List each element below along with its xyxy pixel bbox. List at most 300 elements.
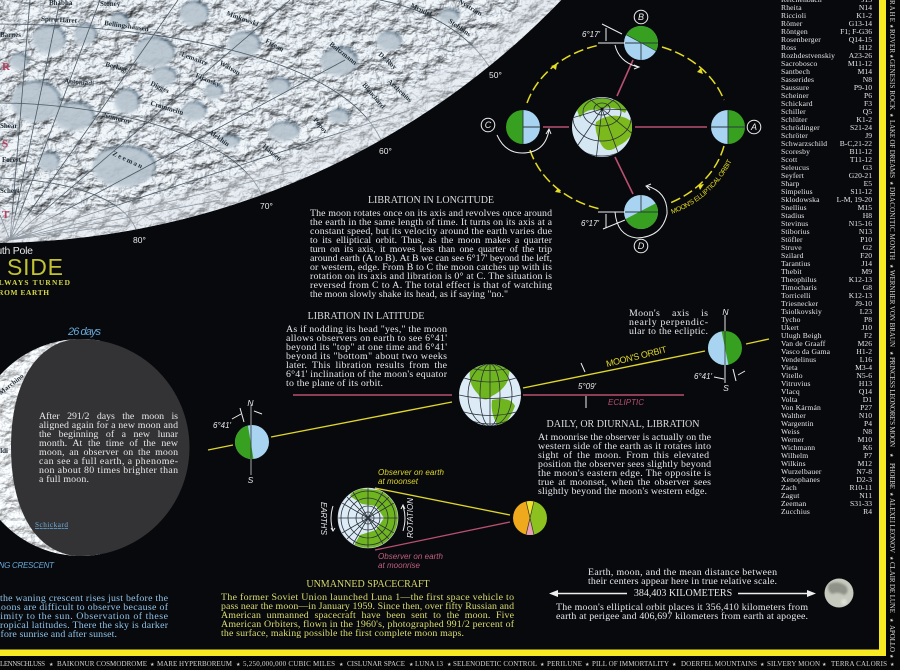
bottom border text: DOERFEL MOUNTAINS	[681, 660, 757, 668]
moon's axis note: nearly perpendic-	[629, 317, 708, 328]
right border text: ★	[888, 453, 894, 458]
crater grid references: G13-14	[849, 19, 872, 28]
crater names: Stöfler	[781, 235, 803, 244]
pink radius lines	[543, 60, 707, 194]
new moon text: aligned again for a new moon and	[39, 420, 178, 431]
crater grid references: K1-2	[856, 115, 872, 124]
crater grid references: R10-11	[850, 483, 872, 492]
crater names: Wilhelm	[781, 451, 808, 460]
crater names: Vitello	[781, 371, 803, 380]
crater names: Volta	[781, 395, 798, 404]
crater grid references: M3-4	[855, 363, 872, 372]
crater names: Tarantius	[781, 259, 810, 268]
crater names: Simpelius	[781, 187, 813, 196]
crater names: Vieta	[781, 363, 798, 372]
right border text: ★	[888, 556, 894, 561]
crater names: Zeeman	[781, 499, 806, 508]
moon diurnal	[513, 500, 547, 536]
crater grid references: K12-13	[849, 275, 872, 284]
bottom border text: ★	[150, 662, 155, 668]
crater grid references: M11-12	[848, 59, 872, 68]
new moon text	[39, 411, 179, 485]
crater grid references: H13	[859, 379, 872, 388]
crater grid references: E5	[864, 179, 872, 188]
panel: daily libration text	[538, 419, 712, 497]
graticule	[0, 0, 490, 240]
latitude labels: 60°	[379, 146, 392, 156]
moon labels: Blanchard	[360, 81, 387, 111]
moon labels	[0, 0, 484, 195]
crater names: Scheiner	[781, 91, 809, 100]
diagram labels: 5°09'	[578, 382, 597, 391]
crater names: Stadius	[781, 211, 804, 220]
pink grid letters	[2, 61, 11, 221]
crater grid references: K1-2	[856, 11, 872, 20]
crater names: Wargentin	[781, 419, 814, 428]
bottom border text: PILL OF IMMORTALITY	[592, 660, 669, 668]
right border text: ★	[888, 113, 894, 118]
panel: libration in latitude text: As if nodding its head "yes," the moon	[286, 324, 447, 335]
panel: unmanned spacecraft: The former Soviet Union launched Luna 1—the first space vehicle to	[221, 592, 514, 603]
panel: libration in longitude text: turn on its axis, it moves less than one quarter of the trip	[310, 244, 552, 255]
crater names: Vasco da Gama	[781, 347, 831, 356]
crescent moon: Schickard	[35, 521, 68, 529]
panel: unmanned spacecraft: UNMANNED SPACECRAFT	[306, 579, 430, 590]
crater grid references: M12	[858, 459, 872, 468]
crater names: Szilard	[781, 251, 804, 260]
moon B	[624, 26, 658, 60]
panel: earth-moon distance scale: Earth, moon, and the mean distance between	[588, 567, 777, 578]
crater names: Scott	[781, 155, 798, 164]
right border text: ★	[888, 351, 894, 356]
crater grid references: J14	[861, 259, 872, 268]
crater names: Wilkins	[781, 459, 806, 468]
panel: libration in latitude text: 6°41' inclination of the moon's equator	[286, 369, 448, 380]
crater grid references: N8	[863, 75, 872, 84]
crater grid references: F2	[864, 331, 872, 340]
moon labels: Crommelin	[149, 99, 184, 117]
position letters: B	[638, 12, 644, 22]
crater grid references: M9	[861, 267, 872, 276]
position letters	[481, 10, 761, 253]
moon labels: Minkowski	[225, 9, 260, 28]
crater grid references: M26	[858, 339, 872, 348]
panel: libration in longitude text: reversed from C to A. The total effect is that of watching	[310, 280, 552, 291]
crater grid references: N10	[859, 411, 872, 420]
crater names: Struve	[781, 243, 802, 252]
panel: daily libration text: true at moonset, when the observer sees	[538, 477, 711, 488]
crater names: Seleucus	[781, 163, 809, 172]
bottom border text: ★	[822, 662, 827, 668]
moon labels: Arrhenius	[386, 78, 414, 104]
crater grid references: H1-2	[856, 347, 872, 356]
crater grid references: P8	[864, 315, 872, 324]
bottom border text: ★	[760, 662, 765, 668]
crater names: Timocharis	[781, 283, 817, 292]
crescent moon: 26 days	[67, 326, 102, 338]
panel: libration in latitude text: beyond its "top" at one time and 6°41'	[286, 342, 447, 353]
crater names: Van de Graaff	[781, 339, 826, 348]
position letters: A	[750, 122, 757, 132]
waning crescent label and text: the waning crescent rises just before the	[0, 593, 169, 604]
diagram labels: N	[722, 307, 729, 317]
panel: daily libration text: sight of the moon. From this elevated	[538, 450, 709, 461]
crater grid references: H8	[863, 211, 872, 220]
crater grid references: J10	[861, 323, 872, 332]
moon labels: Shear	[0, 122, 18, 130]
right border text: ★	[888, 24, 894, 29]
crater grid references: S31-33	[850, 499, 872, 508]
crater grid references: Q5	[863, 107, 872, 116]
right border text: ★	[888, 618, 894, 623]
panel: libration in latitude text	[286, 311, 448, 389]
crater grid references: F1; F-G36	[840, 27, 872, 36]
bottom border text: LENNSCHLUSS	[0, 660, 45, 668]
crater grid references: N15-16	[849, 219, 872, 228]
new moon text: a full moon.	[39, 474, 89, 485]
right border text: WERNHER VON BRAUN	[888, 270, 896, 347]
diagram: diurnal libration	[319, 468, 547, 570]
small full moon	[824, 578, 854, 608]
moon left	[235, 405, 269, 475]
right border text: ★	[888, 181, 894, 186]
crater grid references: Q14-15	[849, 35, 872, 44]
moon labels: Spiru Haret	[41, 15, 78, 25]
moon labels: Hausen	[261, 142, 283, 163]
crater names: Stevinus	[781, 219, 808, 228]
panel: daily libration text: DAILY, OR DIURNAL, LIBRATION	[547, 419, 699, 430]
bottom border text: MARE HYPERBOREUM	[157, 660, 233, 668]
crater grid references: N11	[859, 491, 872, 500]
bottom border text: TERRA CALORIS	[831, 660, 887, 668]
crater names: Sacrobosco	[781, 59, 818, 68]
crater names: Schlüter	[781, 115, 808, 124]
crater names: Santbech	[781, 67, 810, 76]
crater grid references: S11-12	[850, 187, 872, 196]
crater grid references: M10	[858, 435, 872, 444]
crater names: Schickard	[781, 99, 813, 108]
crater names: Wurzelbauer	[781, 467, 822, 476]
moon labels: Berlage	[104, 60, 129, 74]
moon labels: Lemaître	[180, 50, 209, 67]
moon labels: Digges	[149, 80, 171, 95]
crater names: Schiller	[781, 107, 806, 116]
diagram labels: ECLIPTIC	[608, 398, 644, 407]
crescent moon	[0, 326, 190, 560]
moon labels: Mendel	[409, 2, 433, 18]
diagram labels: N	[247, 398, 254, 408]
right border text: GENESIS ROCK	[888, 59, 896, 110]
crater grid references: P9-10	[854, 83, 872, 92]
moon's axis note: ular to the ecliptic.	[629, 326, 708, 337]
crater grid references: N8	[863, 427, 872, 436]
moon labels: Barnes	[0, 31, 21, 39]
crater grid references: A23-26	[849, 51, 872, 60]
new moon text: can see a full earth, a phenome-	[39, 456, 178, 467]
angle markers	[232, 363, 745, 422]
crater names: Saussure	[781, 83, 810, 92]
right border text: ★	[888, 264, 894, 269]
crater grid references: G8	[863, 283, 872, 292]
crater grid references: D2-3	[856, 475, 872, 484]
panel: unmanned spacecraft: the surface, making possible the first complete moon maps.	[221, 628, 464, 639]
latitude labels: 70°	[260, 201, 273, 211]
right border text: ★	[888, 492, 894, 497]
panel: daily libration text: At moonrise the observer is actually on the	[538, 432, 712, 443]
right border text: DRACONITIC MONTH	[888, 187, 896, 260]
crater grid references: P27	[860, 403, 872, 412]
crater grid references: H12	[859, 43, 872, 52]
crater names: Werner	[781, 435, 804, 444]
panel: earth-moon distance scale: their centers appear here in true relative scale.	[588, 576, 777, 587]
crater grid references: L-M, 19-20	[837, 195, 872, 204]
crater grid references: L23	[860, 307, 872, 316]
diurnal labels: at moonrise	[378, 561, 421, 570]
crater grid references: M14	[858, 67, 872, 76]
crater grid references: F20	[860, 251, 872, 260]
right border text: RAHE	[888, 0, 896, 22]
crater grid references: Q14	[859, 387, 872, 396]
panel: libration in latitude text: allows observers on earth to see 6°41'	[286, 333, 447, 344]
crater names: Sasserides	[781, 75, 814, 84]
panel: daily libration text: western side of the earth as it rotates into	[538, 441, 711, 452]
crater grid references: P4	[864, 419, 872, 428]
longitude angle labels: 6°17'	[581, 219, 600, 228]
pink grid letters: R	[2, 61, 11, 73]
moon C	[506, 110, 540, 144]
crater names: Schrödinger	[781, 123, 820, 132]
crater names: Seyfert	[781, 171, 805, 180]
new moon text: the beginning of a new lunar	[39, 429, 179, 440]
crater names: Zucchius	[781, 507, 810, 516]
crater names: Vitruvius	[781, 379, 811, 388]
bottom border text: ★	[890, 662, 895, 668]
moon's axis note: Moon's axis is	[629, 308, 708, 319]
crater grid references: G3	[863, 163, 872, 172]
moon labels: Fizeau	[264, 37, 285, 54]
diagram: libration in latitude	[208, 307, 769, 485]
new moon text: moon, an observer on the moon	[39, 447, 178, 458]
bottom border text: ★	[236, 662, 241, 668]
bottom border text: SELENODETIC CONTROL	[453, 660, 537, 668]
panel: unmanned spacecraft: American unmanned spacecraft have been sent to the moon. Five	[221, 610, 515, 621]
crater grid references: B11-12	[850, 147, 872, 156]
crater names: Xenophanes	[781, 475, 820, 484]
bottom border text: ★	[585, 662, 590, 668]
panel: libration in longitude text: constant speed, but its velocity around the earth varies due	[310, 226, 553, 237]
moon labels: Bellingshausen	[104, 19, 149, 33]
bottom border text: ★	[447, 662, 452, 668]
crater names: Sklodowska	[781, 195, 820, 204]
crater names: Ross	[781, 43, 796, 52]
moon labels: Zeeman	[111, 150, 145, 171]
panel: libration in longitude text: LIBRATION IN LONGITUDE	[368, 195, 494, 206]
panel: libration in longitude text: around earth (A to B). At B we can see 6°17' beyond the left,	[310, 253, 552, 264]
diurnal labels	[319, 468, 445, 570]
crater grid references: K6	[863, 443, 872, 452]
bottom border text: SILVERY MOON	[767, 660, 820, 668]
crater grid references: T11-12	[850, 155, 872, 164]
moon labels: Numerov	[103, 111, 132, 126]
moon labels: Popov	[311, 116, 330, 136]
panel: daily libration text: the moon's eastern edge. The opposite is	[538, 468, 711, 479]
moon labels: Forest	[2, 156, 22, 164]
moon's axis note	[629, 308, 708, 337]
right border text: LAKE OF DREAMS	[888, 120, 896, 178]
elliptical orbit	[527, 45, 724, 209]
panel: libration in longitude text: or western, edge. From B to C the moon catches up with its	[310, 262, 552, 273]
orbit line	[208, 339, 769, 450]
panel: libration in latitude text: to the plane of its orbit.	[286, 378, 383, 389]
bottom border text: LUNA 13	[415, 660, 444, 668]
panel: libration in longitude text: the moon slowly shake its head, as if saying "no."	[310, 289, 508, 300]
crater grid references: M15	[858, 203, 872, 212]
moon A	[711, 110, 745, 144]
panel: libration in longitude text	[310, 195, 553, 300]
longitude angle labels: 6°17'	[582, 30, 601, 39]
moon labels: Watson	[218, 59, 242, 77]
bottom border text: PERILUNE	[547, 660, 582, 668]
rotation arrows	[331, 505, 405, 531]
latitude labels: 50°	[489, 70, 502, 80]
earth globe from pole	[338, 488, 398, 552]
map title: far side	[0, 245, 70, 297]
crater grid references: B-C,21-22	[840, 139, 872, 148]
crater grid references: N13	[859, 227, 872, 236]
crater names: Rosenberger	[781, 35, 821, 44]
bottom border text: BAIKONUR COSMODROME	[57, 660, 147, 668]
crater grid references: P10	[860, 235, 872, 244]
panel: earth-moon distance scale	[549, 567, 854, 622]
moon labels: De Roy	[377, 51, 399, 72]
crater grid references: J9-10	[855, 299, 872, 308]
panel: daily libration text: position the observer sees slightly beyond	[538, 459, 711, 470]
crater names: Scoresby	[781, 147, 810, 156]
moon right	[705, 315, 742, 383]
crater grid references: K12-13	[849, 291, 872, 300]
diagram labels: S	[723, 383, 729, 393]
bottom border text: 5,250,000,000 CUBIC MILES	[243, 660, 335, 668]
panel: earth-moon distance scale: 384,403 KILOMETERS	[634, 588, 732, 599]
crater names: Theophilus	[781, 275, 817, 284]
panel: unmanned spacecraft: pass near the moon—in January 1959. Since then, over fifty Russian and	[221, 601, 514, 612]
panel: libration in longitude text: rotation on its axis and libration is 0° at C. The situation is	[310, 271, 552, 282]
crater names: Triesnecker	[781, 299, 819, 308]
moon labels: Fijansky	[194, 71, 222, 89]
new moon text: month. At the time of the new	[39, 438, 179, 449]
crater names: Riccioli	[781, 11, 806, 20]
right border text: PHOEBE	[888, 463, 896, 489]
crater names: Sharp	[781, 179, 800, 188]
pink grid letters: T	[2, 209, 10, 221]
right border text: APOLLO	[888, 625, 896, 652]
craters	[9, 0, 460, 188]
panel: libration in longitude text: to its elliptical orbit. Thus, as the moon makes a quarter	[310, 235, 553, 246]
latitude labels: 80°	[133, 235, 146, 245]
new moon text: non about 80 times brighter than	[39, 465, 178, 476]
earth globe polar view	[572, 97, 632, 157]
bottom border text: ★	[409, 662, 414, 668]
crater grid references: N14	[859, 3, 872, 12]
panel: unmanned spacecraft	[221, 579, 515, 639]
crater names: Torricelli	[781, 291, 811, 300]
crater names: Schwarzschild	[781, 139, 827, 148]
panel: earth-moon distance scale: The moon's elliptical orbit places it 356,410 kilometers from	[556, 602, 808, 613]
crater grid references: D1	[863, 395, 872, 404]
crater names: Römer	[781, 19, 803, 28]
moon labels: Schert	[0, 187, 20, 195]
earth globe americas	[459, 364, 521, 428]
crater names: Stiborius	[781, 227, 810, 236]
crater names: Röntgen	[781, 27, 808, 36]
crater names: Rozhdestvenskiy	[781, 51, 835, 60]
pink grid letters: S	[2, 138, 8, 150]
diagram labels: MOON'S ORBIT	[605, 344, 668, 369]
panel: unmanned spacecraft: American Orbiters, flown in the 1960's, photographed 991/2 percent of	[221, 619, 515, 630]
longitude angle labels	[581, 30, 601, 228]
panel: libration in latitude text: beyond its "bottom" about two weeks	[286, 351, 447, 362]
panel: earth-moon distance scale: earth at perigee and 406,697 kilometers from earth at apogee.	[556, 611, 808, 622]
bottom border text: CISLUNAR SPACE	[347, 660, 405, 668]
waning crescent label and text: tropical latitudes. There the sky is darker	[0, 620, 169, 631]
panel: libration in longitude text: The moon rotates once on its axis and revolves once around	[310, 208, 552, 219]
crater names: Zagut	[781, 491, 800, 500]
map title: far side: SIDE	[7, 254, 63, 280]
right border text: CLAIR DE LUNE	[888, 562, 896, 613]
moon D	[624, 195, 658, 229]
crater names: Tycho	[781, 315, 801, 324]
crater grid references: N5-6	[856, 371, 872, 380]
crater grid references: J9	[865, 131, 872, 140]
diagram labels: 6°41'	[213, 421, 232, 430]
sight lines	[375, 488, 510, 550]
crater grid references: P6	[864, 91, 872, 100]
crater names: Vlacq	[781, 387, 800, 396]
crater names: Snellius	[781, 203, 807, 212]
bottom border text: ★	[339, 662, 344, 668]
moon labels: Antoniadi	[64, 77, 94, 88]
crater names: Schröter	[781, 131, 808, 140]
diagram: libration in longitude	[480, 10, 762, 254]
diurnal labels: EARTH'S	[319, 502, 328, 536]
panel: libration in longitude text: the earth in the same length of time. It turns on its axis at a	[310, 217, 553, 228]
diagram labels: 6°41'	[694, 372, 713, 381]
orbit label: MOON'S ELLIPTICAL ORBIT	[671, 158, 731, 214]
diurnal labels: at moonset	[378, 477, 419, 486]
position letters: D	[638, 241, 645, 251]
diurnal labels: ROTATION	[406, 498, 415, 538]
crater names: Walther	[781, 411, 806, 420]
crater grid references: N7-8	[856, 467, 872, 476]
crater grid references: L16	[860, 355, 872, 364]
crater grid references: F3	[864, 99, 872, 108]
bottom border text: ★	[49, 662, 54, 668]
crater names: Ulugh Beigh	[781, 331, 822, 340]
panel: daily libration text: slightly beyond the moon's western edge.	[538, 486, 707, 497]
moon labels: Alekhin	[207, 128, 231, 148]
right border text: ★	[888, 654, 894, 659]
rotation arrows and angle markers	[497, 24, 667, 238]
crater grid references: R4	[863, 507, 872, 516]
diagram labels	[213, 307, 729, 485]
crater names: Thebit	[781, 267, 802, 276]
crater grid references: G20-21	[849, 171, 872, 180]
moon labels: Boltzmann	[328, 40, 359, 67]
moon labels: Stebbins	[447, 17, 473, 39]
crater names: Vendelinus	[781, 355, 816, 364]
right border text: ROVER	[888, 29, 896, 53]
crater names: Von Kármán	[781, 403, 821, 412]
